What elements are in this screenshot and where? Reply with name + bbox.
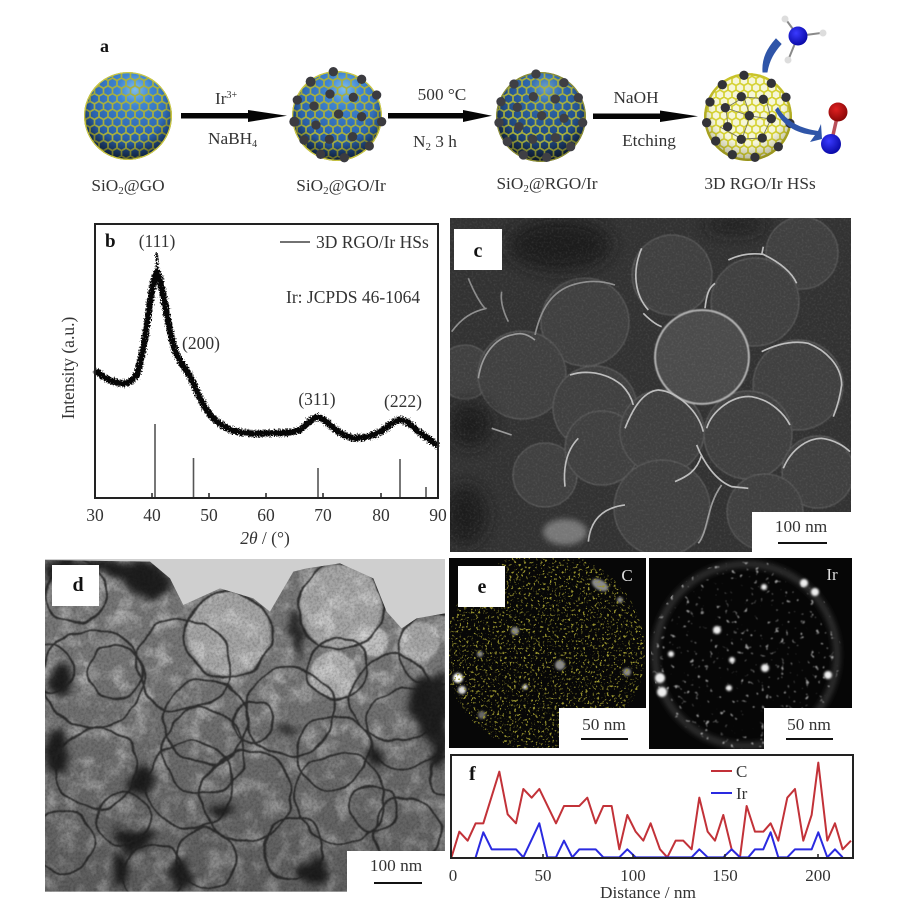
sphere: 3D RGO/Ir hollow structure: [702, 71, 795, 162]
scale bar e left: [559, 708, 646, 748]
chart frame: [451, 755, 853, 858]
scale bar e right: 50 nm: [787, 715, 831, 734]
panel letter b: b: [105, 231, 116, 252]
y-axis title: Intensity (a.u.): [58, 317, 78, 419]
x-axis tick labels: 100: [620, 866, 646, 885]
panel e: elemental maps: [449, 558, 852, 749]
reagent: Ir3+: 3+: [227, 90, 238, 101]
scale bar e left: 50 nm: [582, 715, 626, 734]
legend: C: C: [736, 762, 747, 781]
map: iridium: [649, 558, 852, 749]
sphere: SiO2@GO: [84, 72, 172, 160]
reference stick pattern: [155, 424, 426, 498]
x-axis tick labels: [449, 866, 831, 885]
panel b: XRD chart: [58, 224, 447, 548]
x-axis tick labels: 90: [429, 505, 447, 525]
label: C: C: [621, 566, 633, 585]
condition: N2 3 h: 3 h: [431, 132, 457, 151]
sphere rings: [45, 560, 445, 892]
scale bar e right: [764, 708, 852, 749]
label: SiO2@RGO/Ir: 2: [523, 183, 529, 195]
x-axis tick labels: [86, 505, 447, 525]
reference card note: Ir: JCPDS 46-1064: [286, 287, 420, 307]
peak label 111: (111): [139, 231, 175, 251]
x-axis ticks: [152, 493, 381, 498]
dark clumps: [45, 560, 450, 893]
label: SiO2@RGO/Ir: @RGO/Ir: [529, 174, 598, 193]
condition: 500 C: 500 °C: [418, 85, 466, 104]
x-axis tick labels: 30: [86, 505, 104, 525]
molecule: nitric oxide: [821, 102, 848, 154]
chart frame: [95, 224, 438, 498]
label: SiO2@GO: @GO: [124, 176, 165, 195]
peak label 311: (311): [298, 389, 336, 409]
step: Etching: Etching: [622, 131, 676, 150]
panel f: line scan chart: [449, 755, 853, 902]
scale bar d: [347, 851, 445, 892]
label: SiO2@GO: 2: [118, 185, 124, 197]
label: SiO2@GO/Ir: @GO/Ir: [329, 176, 386, 195]
scale bar c: [752, 512, 851, 553]
label box d: d: [72, 574, 84, 596]
x-axis tick labels: 70: [314, 505, 332, 525]
peak label 222: (222): [384, 391, 422, 411]
arrow: NaOH etching step: [593, 110, 698, 122]
x-axis tick labels: 40: [143, 505, 161, 525]
label: SiO2@RGO/Ir: SiO: [496, 174, 523, 193]
grain: [45, 560, 445, 892]
peak label 200: (200): [182, 333, 220, 353]
x-axis ticks: [543, 854, 818, 858]
arrow: to nitrogen monoxide: [775, 107, 822, 142]
panel c: SEM image: [438, 217, 854, 556]
chart series: [452, 763, 851, 857]
x-axis title: 2θ / (°): [240, 528, 290, 548]
panel a: synthesis scheme: [84, 16, 848, 197]
mottled texture: [45, 560, 445, 892]
dark voids: [443, 217, 765, 545]
reagent: Ir3+: Ir: [215, 89, 227, 108]
label box c: [454, 229, 502, 270]
legend: C: [711, 762, 747, 781]
scale bar c: 100 nm: [775, 517, 828, 536]
map: carbon: [449, 558, 646, 748]
x-axis tick labels: 80: [372, 505, 390, 525]
x-axis title: Distance / nm: [600, 883, 697, 902]
label: Ir: Ir: [826, 565, 838, 584]
x-axis tick labels: 60: [257, 505, 275, 525]
molecule: ammonia: [782, 16, 826, 64]
panel letter f: f: [469, 763, 476, 785]
x-axis tick labels: 150: [712, 866, 738, 885]
legend: Ir: Ir: [736, 784, 748, 803]
x-axis tick labels: 50: [534, 866, 552, 885]
arrow: Ir3+ NaBH4 step: [181, 110, 287, 122]
label box c: c: [474, 240, 483, 262]
bright debris at bottom: [543, 519, 587, 545]
sphere: SiO2@GO/Ir: [289, 67, 386, 162]
label: 3D RGO/Ir HSs: 3D RGO/Ir HSs: [704, 174, 816, 193]
scale bar d: 100 nm: [370, 856, 423, 875]
x-axis tick labels: 50: [200, 505, 218, 525]
XRD intensity curve: [95, 252, 438, 446]
legend: 3D RGO/Ir HSs: [316, 232, 429, 252]
legend: Ir: [711, 784, 748, 803]
reagent: NaOH: NaOH: [613, 88, 659, 107]
label box d: [52, 565, 99, 606]
bright sphere edges: [452, 247, 850, 543]
light sphere interiors: [187, 565, 440, 698]
carbon line: [452, 763, 851, 857]
arrow: up to NH3: [763, 39, 781, 72]
x-axis tick labels: 0: [449, 866, 457, 885]
reagent: NaBH4: NaBH: [208, 129, 252, 148]
label: SiO2@GO/Ir: 2: [323, 185, 329, 197]
condition: N2 3 h: 2: [425, 141, 431, 153]
label box e: e: [478, 576, 487, 598]
spheres in SEM: [438, 217, 854, 556]
panel letter a: a: [100, 36, 109, 56]
grain: [450, 218, 851, 552]
darker lower body: [45, 712, 445, 892]
reagent: NaBH4: 4: [252, 139, 257, 150]
condition: N2 3 h: N: [413, 132, 425, 151]
label: SiO2@GO/Ir: SiO: [296, 176, 323, 195]
iridium line: [476, 823, 843, 857]
x-axis tick labels: 200: [805, 866, 831, 885]
panel d: TEM image: [45, 559, 445, 892]
sphere: SiO2@RGO/Ir: [494, 69, 587, 162]
label box e: [458, 566, 505, 607]
label: SiO2@GO: SiO: [91, 176, 118, 195]
arrow: 500 C step: [388, 110, 492, 122]
